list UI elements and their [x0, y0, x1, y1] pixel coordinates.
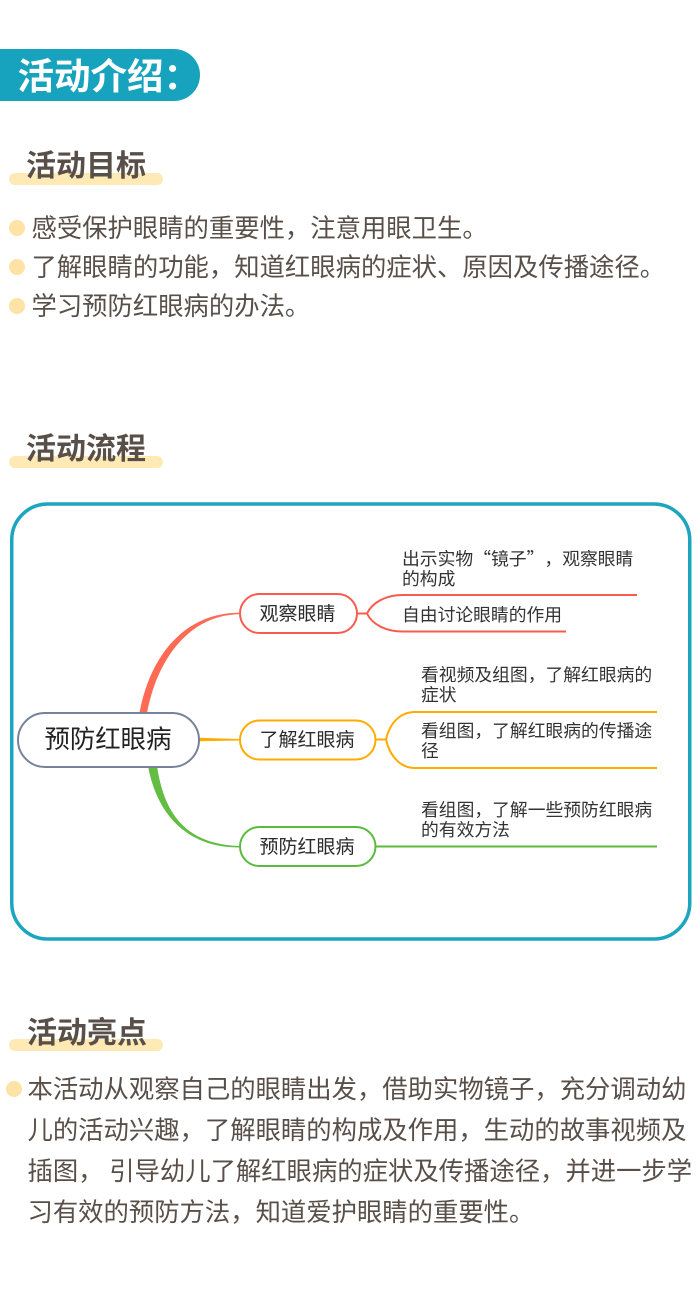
leaf: 视频: 症状 — [421, 681, 457, 707]
text block: activity highlights: 本活动从观察自己的眼睛出发，借助实物镜子，充分调动幼 — [28, 1070, 686, 1106]
banner: 活动介绍: 活动介绍： — [18, 47, 200, 100]
text block: activity highlights: 儿的活动兴趣，了解眼睛的构成及作用，生动的故事视频及 — [28, 1111, 686, 1147]
text block: activity highlights: 习有效的预防方法，知道爱护眼睛的重要性。 — [28, 1193, 534, 1229]
leaf: 讨论: 自由讨论眼睛的作用 — [402, 601, 562, 627]
node: root 预防红眼病: 预防红眼病 — [44, 720, 171, 756]
leaf: 视频: 看视频及组图，了解红眼病的 — [421, 661, 652, 687]
node: 了解红眼病 — [240, 720, 376, 760]
leaf: 镜子: 的构成 — [402, 565, 456, 591]
leaf: 预防方法: 看组图，了解一些预防红眼病 — [421, 796, 652, 822]
list: activity goals — [9, 209, 665, 323]
list: activity goals: 学习预防红眼病的办法。 — [32, 287, 310, 323]
node: 预防红眼病: 预防红眼病 — [260, 832, 355, 859]
leaf: 镜子: 观察眼睛 — [562, 545, 633, 571]
connector: green leaf — [376, 846, 657, 848]
node: 预防红眼病 — [240, 827, 376, 866]
leaf: 镜子: 镜子 — [491, 545, 527, 571]
panel: mind map frame — [12, 504, 690, 939]
node: 观察眼睛: 观察眼睛 — [260, 599, 336, 626]
heading: 活动目标: 活动目标 — [26, 141, 146, 185]
list: activity goals: 了解眼睛的功能，知道红眼病的症状、原因及传播途径。 — [32, 248, 665, 284]
leaf: 镜子: “ — [473, 545, 491, 571]
node: 观察眼睛 — [240, 594, 357, 633]
leaf: 传播途径: 看组图，了解红眼病的传播途 — [421, 717, 652, 743]
text block: activity highlights — [6, 1070, 692, 1229]
leaf: 镜子: 出示实物 — [402, 545, 473, 571]
branch: root to 了解红眼病 — [199, 738, 239, 741]
connector: red leaves — [357, 595, 637, 632]
list: activity goals: 感受保护眼睛的重要性，注意用眼卫生。 — [32, 209, 488, 245]
leaf: 镜子: ” — [527, 545, 544, 571]
leaf: 镜子: ， — [544, 545, 562, 571]
node: 了解红眼病: 了解红眼病 — [260, 725, 355, 752]
branch: root to 预防红眼病 — [148, 766, 239, 848]
leaf: 预防方法: 的有效方法 — [421, 816, 510, 842]
branch: root to 观察眼睛 — [140, 613, 239, 713]
heading: 活动流程: 活动流程 — [26, 424, 146, 468]
leaf: 传播途径: 径 — [421, 737, 439, 763]
text block: activity highlights: 插图， 引导幼儿了解红眼病的症状及传播途径，并进一步学 — [28, 1152, 692, 1188]
heading: 活动亮点: 活动亮点 — [27, 1008, 147, 1052]
node: root 预防红眼病 — [18, 713, 199, 767]
connector: orange leaves — [376, 712, 657, 768]
